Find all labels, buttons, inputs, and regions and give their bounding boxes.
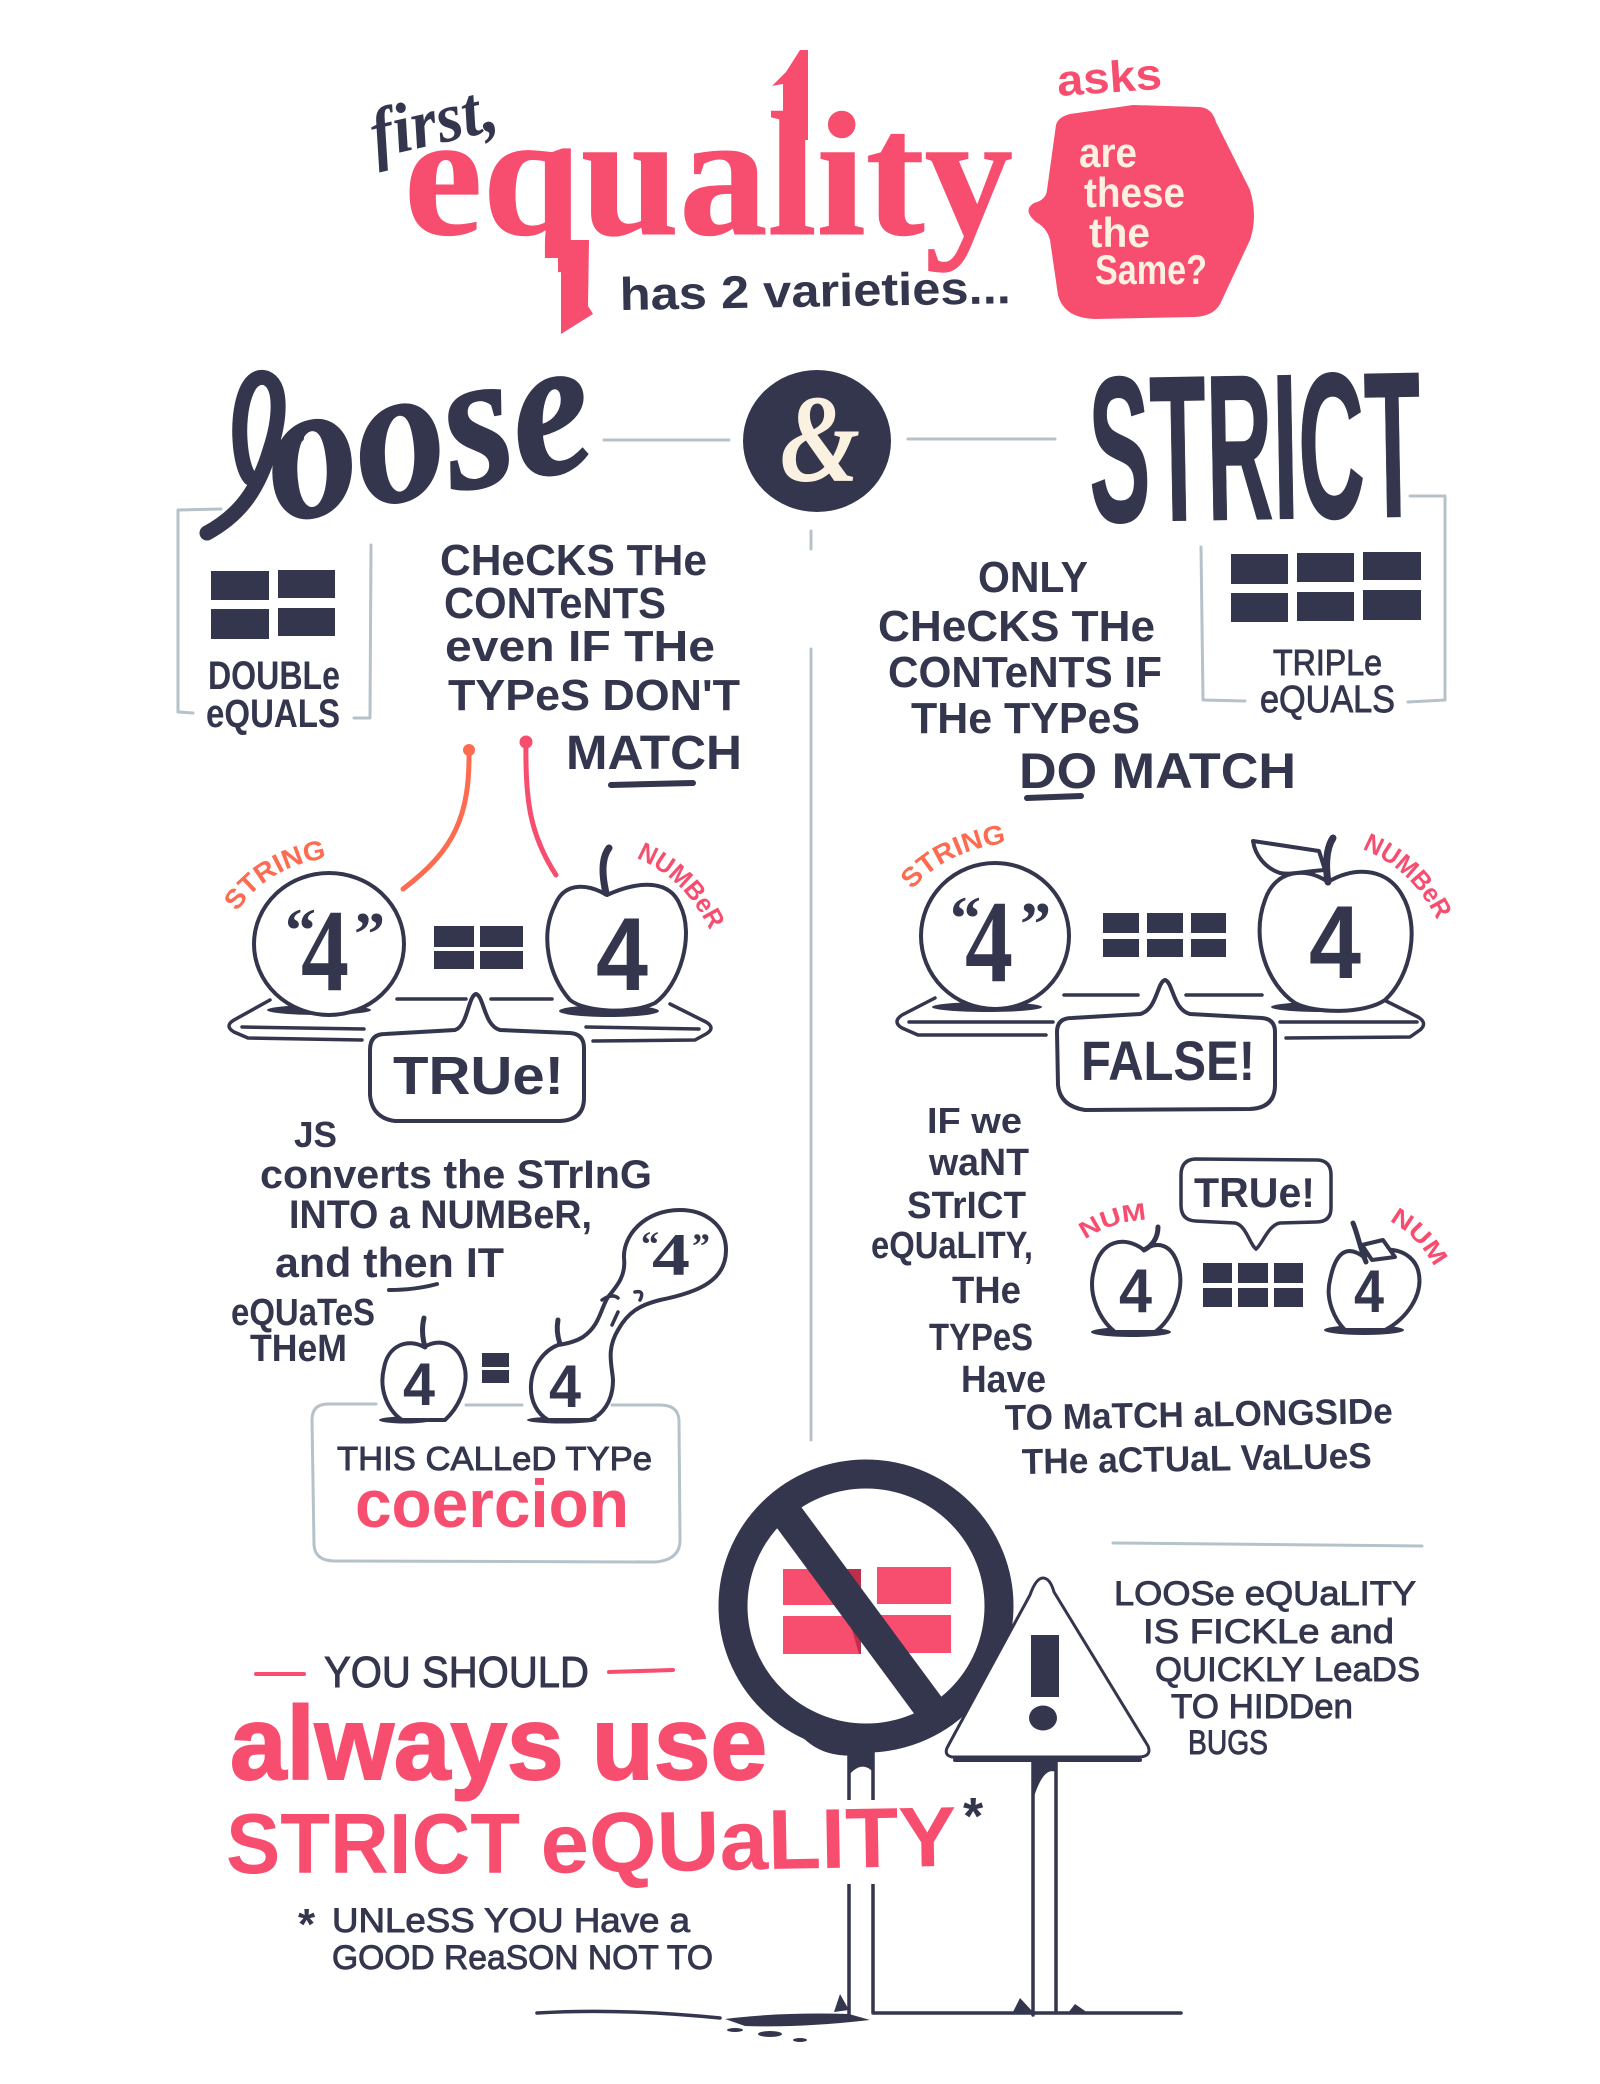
panel: type coercion box: THIS CALLeD TYPe [337, 1440, 652, 1477]
footnote: unless you have a good reason: * [298, 1900, 316, 1949]
warning triangle sign [946, 1578, 1149, 1760]
title: first, equality has 2 varieties: equality [404, 77, 1013, 273]
conclusion: you should always use strict equality [226, 1648, 984, 1892]
footnote: unless you have a good reason: UNLeSS YOU Have a [332, 1902, 690, 1940]
text: loose equality is fickle: BUGS [1188, 1724, 1268, 1762]
callout: true: TRUe! [1194, 1169, 1315, 1216]
text: if we want strict equality: STrICT [907, 1185, 1026, 1227]
callout: false [1057, 980, 1275, 1110]
icon: triple equals [1103, 913, 1226, 957]
footnote: unless you have a good reason [298, 1900, 713, 1977]
text: checks the contents even if types don't match: TYPeS DON'T [448, 671, 740, 720]
text: if we want strict equality: eQUaLITY, [871, 1225, 1033, 1267]
apple: num [1078, 1203, 1182, 1330]
callout: true: TRUe! [393, 1046, 564, 1106]
heading: loose: oose [247, 291, 607, 565]
diagram: num triple equals num true [1078, 1157, 1448, 1337]
ampersand badge with connector lines: & [780, 371, 860, 509]
text: checks the contents even if types don't match: MATCH [566, 727, 742, 780]
conclusion: you should always use strict equality: always use [230, 1686, 767, 1802]
text: only checks the contents if types do match [878, 553, 1296, 799]
panel: double equals: DOUBLe [208, 654, 340, 698]
ampersand badge with connector lines [604, 370, 1055, 512]
conclusion: you should always use strict equality: STRICT [226, 1797, 520, 1892]
text: checks the contents even if types don't match: CONTeNTS [444, 579, 666, 628]
text: if we want strict equality: Have [961, 1359, 1046, 1401]
panel: triple equals: TRIPLe [1273, 642, 1382, 683]
text: checks the contents even if types don't match [440, 536, 742, 785]
apple: number 4: NUMBeR [638, 842, 724, 930]
panel: triple equals [1201, 496, 1445, 721]
panel: triple equals: eQUALS [1260, 679, 1395, 721]
text: js converts the string: INTO a NUMBeR, [289, 1193, 592, 1237]
text: if we want strict equality: TO MaTCH aLONGSIDe [1004, 1390, 1393, 1438]
apple: string 4: ” [1020, 891, 1051, 959]
apples: coerced 4 equals 4: 4 [403, 1351, 436, 1418]
callout: true [1181, 1159, 1331, 1249]
apple: num with leaf [1326, 1208, 1448, 1328]
conclusion: you should always use strict equality: * [963, 1788, 984, 1846]
apple: string 4: “ [950, 885, 981, 953]
speech bubble: asks are these the same: the [1089, 209, 1150, 256]
text: js converts the string: JS [294, 1114, 337, 1155]
speech bubble: asks are these the same [1028, 50, 1254, 319]
apple: number 4 [545, 842, 724, 1013]
apple: string 4: “ [285, 897, 316, 965]
speech bubble: asks are these the same: these [1084, 169, 1185, 216]
title: first, equality has 2 varieties [362, 50, 1013, 334]
apple: string 4: STRING [902, 826, 1004, 887]
text: js converts the string: eQUaTeS [231, 1292, 375, 1334]
text: if we want strict equality [871, 1100, 1393, 1482]
icon: triple equals [1203, 1263, 1303, 1307]
text: checks the contents even if types don't match: even IF THe [445, 622, 715, 671]
apple: string 4: 4 [301, 885, 349, 1016]
text: if we want strict equality: waNT [928, 1142, 1029, 1184]
blob: string 4 morphing: “ [641, 1224, 659, 1264]
scale: loose comparison [225, 841, 724, 1123]
icon: double equals [434, 926, 523, 969]
blob: string 4 morphing: ” [692, 1226, 710, 1266]
blob: string 4 morphing: 4 [549, 1353, 582, 1420]
apple: string 4: ” [354, 901, 385, 969]
footnote: unless you have a good reason: GOOD ReaSON NOT TO [332, 1939, 713, 1977]
no-entry sign over equals [733, 1474, 999, 1756]
conclusion: you should always use strict equality: eQUaLITY [540, 1790, 957, 1892]
callout: false: FALSE! [1081, 1029, 1255, 1092]
text: js converts the string: and then IT [275, 1239, 504, 1286]
speech bubble: asks are these the same: are [1079, 129, 1137, 176]
panel: double equals: eQUALS [206, 692, 340, 736]
apple: num with leaf: 4 [1354, 1258, 1385, 1325]
text: js converts the string: THeM [250, 1328, 347, 1370]
callout: true [370, 994, 584, 1121]
apple: string 4 [225, 841, 406, 1017]
blob: string 4 morphing: 4 [652, 1222, 690, 1288]
text: loose equality is fickle: QUICKLY LeaDS [1155, 1651, 1420, 1689]
text: only checks the contents if types do match: THe TYPeS [911, 694, 1140, 743]
text: loose equality is fickle: TO HIDDen [1171, 1688, 1353, 1726]
text: loose equality is fickle: LOOSe eQUaLITY [1114, 1575, 1416, 1613]
apples: coerced 4 equals 4 [379, 1210, 726, 1424]
text: if we want strict equality: TYPeS [929, 1317, 1033, 1359]
speech bubble: asks are these the same: asks [1055, 50, 1163, 106]
blob: string 4 morphing [531, 1210, 726, 1420]
text: if we want strict equality: THe aCTUaL VaLUeS [1021, 1435, 1372, 1482]
text: only checks the contents if types do match: CONTeNTS IF [888, 648, 1162, 697]
text: if we want strict equality: IF we [927, 1100, 1022, 1141]
apple: number 4 with leaf [1251, 833, 1450, 1013]
scale: strict comparison [895, 826, 1450, 1112]
conclusion: you should always use strict equality: YOU SHOULD [324, 1648, 589, 1697]
text: if we want strict equality: THe [952, 1270, 1021, 1312]
apple: num: 4 [1119, 1257, 1152, 1326]
panel: double equals [178, 509, 371, 736]
text: js converts the string [231, 1114, 652, 1370]
text: only checks the contents if types do match: ONLY [978, 553, 1088, 602]
apple: string 4 [902, 826, 1071, 1007]
text: only checks the contents if types do match: DO MATCH [1019, 743, 1296, 799]
apple: number 4 with leaf: NUMBeR [1364, 833, 1450, 920]
connectors from text to apples [403, 736, 556, 889]
apple: num with leaf: NUM [1390, 1208, 1448, 1266]
text: loose equality is fickle: IS FICKLe and [1143, 1613, 1394, 1651]
center divider [810, 531, 812, 1440]
apple: number 4 with leaf: 4 [1309, 885, 1361, 1001]
text: only checks the contents if types do match: CHeCKS THe [878, 602, 1155, 651]
speech bubble: asks are these the same: Same? [1095, 246, 1207, 293]
title: first, equality has 2 varieties: first, [362, 70, 504, 174]
text: checks the contents even if types don't match: CHeCKS THe [440, 536, 707, 585]
apple: number 4: 4 [596, 897, 648, 1013]
panel: type coercion box [312, 1404, 680, 1562]
apple: string 4: STRING [225, 841, 324, 909]
title: first, equality has 2 varieties: has 2 varieties... [619, 261, 1011, 320]
apple: string 4: 4 [965, 876, 1013, 1007]
text: loose equality is fickle [1113, 1543, 1422, 1762]
panel: type coercion box: coercion [355, 1466, 629, 1542]
apple: num: NUM [1078, 1203, 1145, 1238]
text: js converts the string: converts the STrInG [260, 1153, 652, 1197]
sign posts and ground [537, 1750, 1181, 2042]
